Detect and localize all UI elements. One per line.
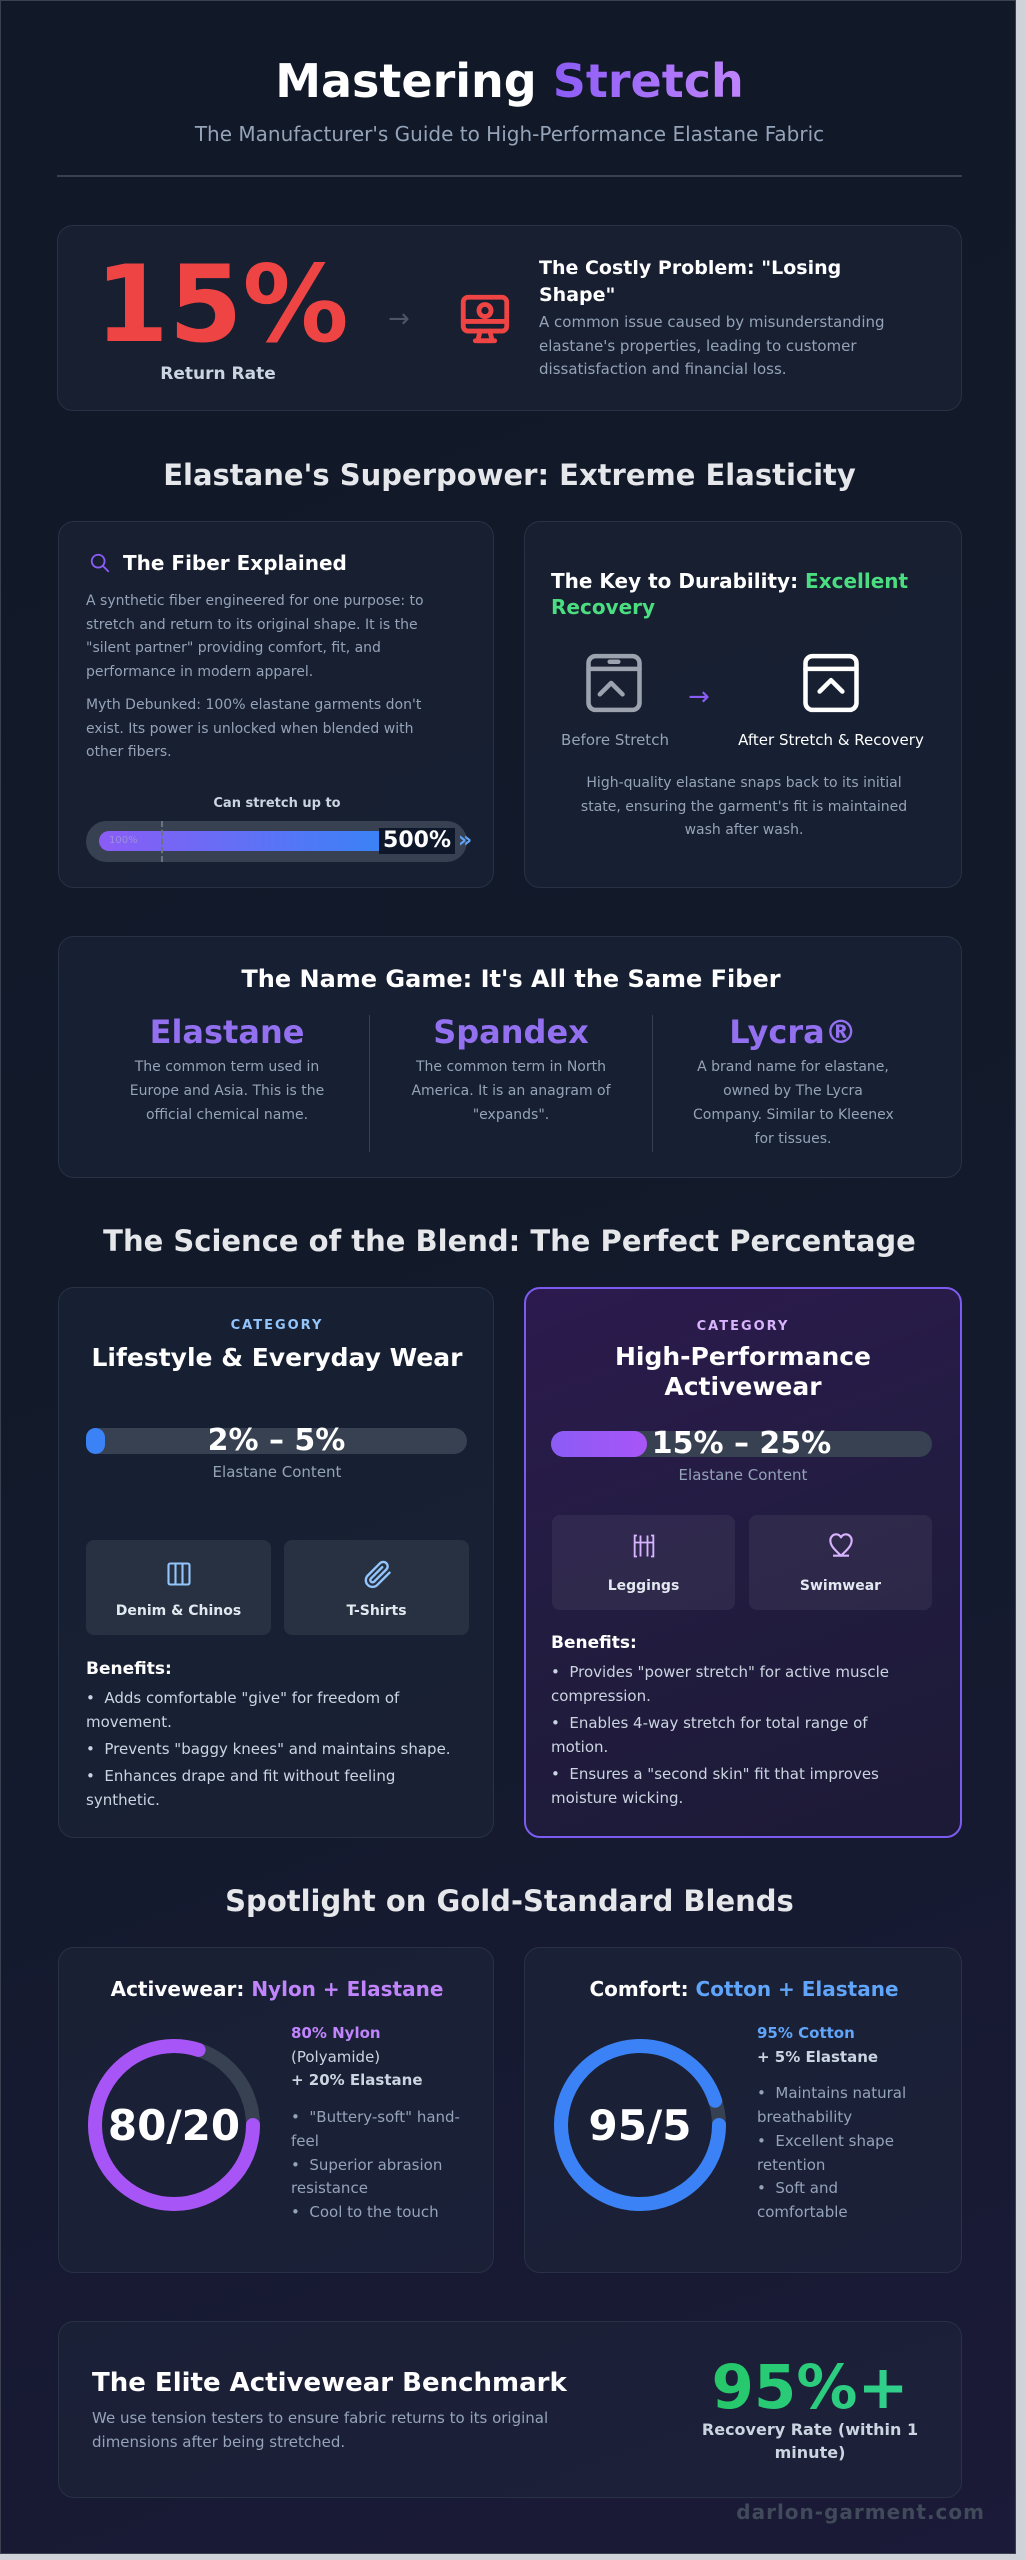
label: can stretch: Can stretch up to: [213, 796, 341, 811]
text: fiber description: "silent partner" providing comfort, fit, and: [86, 640, 381, 656]
list: lifestyle benefits: movement.: [86, 1713, 172, 1731]
heading: superpower: Elastane's Superpower: Extreme Elasticity: [163, 458, 856, 492]
heading: name game: The Name Game: It's All the Same Fiber: [241, 965, 781, 993]
panel: benchmark: [58, 2321, 962, 2498]
chart: donut 95/5: [554, 2039, 726, 2211]
text: problem: dissatisfaction and financial loss.: [539, 360, 787, 378]
text: cotton composition: • Excellent shape: [757, 2132, 894, 2150]
chart: stretch bar: 500%: [383, 828, 451, 853]
panel: costly problem: [57, 225, 962, 411]
text: benchmark description: [92, 2409, 548, 2451]
text: fiber description: performance in modern apparel.: [86, 664, 313, 680]
chart: 15-25% bar: [551, 1431, 932, 1457]
column: spandex: "expands".: [473, 1107, 549, 1123]
list: lifestyle benefits: • Adds comfortable "give" for freedom of: [86, 1689, 399, 1707]
stat: 95%+: [660, 2352, 960, 2424]
heading: key to durability: [551, 569, 908, 619]
text: problem: [539, 257, 885, 378]
text: fiber description: A synthetic fiber engineered for one purpose: to: [86, 593, 424, 609]
label: after stretch: After Stretch & Recovery: [738, 731, 924, 749]
text: nylon composition: • Cool to the touch: [291, 2203, 439, 2221]
subtitle: The Manufacturer's Guide to High-Performance Elastane Fabric: [195, 122, 824, 146]
icon: monitor: [460, 294, 510, 344]
text: nylon composition: + 20% Elastane: [291, 2071, 422, 2089]
list: lifestyle benefits: [86, 1659, 451, 1809]
chart: donut 80/20: [88, 2039, 260, 2211]
list: performance benefits: • Enables 4-way stretch for total range of: [551, 1714, 868, 1732]
column: lycra: for tissues.: [755, 1131, 831, 1147]
column: elastane: The common term used in: [135, 1059, 319, 1075]
panel: cotton blend: [524, 1947, 962, 2273]
text: fiber description: [86, 593, 424, 680]
tile: leggings: [552, 1515, 735, 1610]
label: recovery rate: minute): [775, 2443, 845, 2462]
tile: t-shirts: [284, 1540, 469, 1635]
heading: key to durability: Recovery: [551, 595, 655, 619]
chart: stretch bar: »: [458, 828, 472, 853]
column: lycra: [693, 1013, 894, 1147]
text: benchmark description: We use tension testers to ensure fabric returns to its original: [92, 2409, 548, 2427]
label: elastane content: Elastane Content: [679, 1466, 807, 1484]
icon: magnifier: [90, 554, 110, 572]
text: recovery description: [581, 775, 907, 838]
panel: recovery: [524, 521, 962, 888]
list: lifestyle benefits: • Prevents "baggy knees" and maintains shape.: [86, 1740, 451, 1758]
list: performance benefits: Benefits:: [551, 1633, 637, 1653]
panel: nylon blend: [58, 1947, 494, 2273]
label: return rate: Return Rate: [160, 364, 276, 384]
list: lifestyle benefits: synthetic.: [86, 1791, 160, 1809]
chart: donut 80/20: 80/20: [108, 2101, 240, 2150]
tile: leggings: Leggings: [608, 1578, 679, 1594]
chart: stretch bar: [86, 821, 467, 862]
icon: before stretch: [586, 654, 642, 712]
heading: performance: Activewear: [664, 1372, 822, 1401]
chart: 2-5% bar: [86, 1428, 467, 1454]
chart: 2-5% bar: 2% – 5%: [208, 1423, 345, 1458]
label: before stretch: Before Stretch: [561, 731, 669, 749]
tile: swimwear: Swimwear: [800, 1578, 881, 1594]
panel: name game: [58, 936, 962, 1178]
column: spandex: Spandex: [433, 1013, 589, 1051]
watermark: darlon-garment.com: [736, 2500, 985, 2524]
text: cotton composition: retention: [757, 2156, 825, 2174]
text: fiber description: stretch and return to its original shape. It is the: [86, 617, 418, 633]
text: nylon composition: feel: [291, 2132, 319, 2150]
chart: 15-25% bar: 15% – 25%: [652, 1426, 831, 1461]
chart: donut 95/5: 95/5: [588, 2101, 692, 2150]
text: recovery description: state, ensuring the garment's fit is maintained: [581, 799, 907, 815]
column: elastane: Europe and Asia. This is the: [130, 1083, 324, 1099]
panel: fiber explained: [58, 521, 494, 888]
heading: fiber explained: The Fiber Explained: [123, 551, 347, 575]
heading: lifestyle: Lifestyle & Everyday Wear: [92, 1343, 462, 1372]
text: benchmark description: dimensions after being stretched.: [92, 2433, 345, 2451]
list: performance benefits: moisture wicking.: [551, 1789, 683, 1807]
heading: science of the blend: The Science of the Blend: The Perfect Percentage: [103, 1224, 916, 1258]
arrow: →: [388, 304, 410, 334]
list: performance benefits: [551, 1633, 889, 1807]
label: elastane content: Elastane Content: [213, 1463, 341, 1481]
arrow: purple: →: [688, 682, 710, 712]
column: elastane: Elastane: [150, 1013, 304, 1051]
heading: comfort blend: Comfort: Cotton + Elastane: [589, 1977, 899, 2001]
text: nylon composition: resistance: [291, 2179, 368, 2197]
heading: elite benchmark: The Elite Activewear Benchmark: [92, 2368, 567, 2398]
tile: denim: [86, 1540, 271, 1635]
column: spandex: The common term in North: [416, 1059, 606, 1075]
column: elastane: [130, 1013, 324, 1123]
text: problem: elastane's properties, leading to customer: [539, 337, 857, 355]
heading: performance: [615, 1342, 871, 1401]
text: problem: Shape": [539, 284, 615, 306]
column: elastane: official chemical name.: [146, 1107, 308, 1123]
heading: activewear blend: Activewear: Nylon + Elastane: [111, 1977, 443, 2001]
stat: 95%+: 95%+: [711, 2352, 909, 2423]
text: recovery description: wash after wash.: [685, 822, 803, 838]
text: cotton composition: • Soft and: [757, 2179, 838, 2197]
text: nylon composition: 80% Nylon: [291, 2024, 381, 2042]
text: myth: Myth Debunked: 100% elastane garments don't: [86, 697, 421, 713]
text: cotton composition: breathability: [757, 2108, 852, 2126]
text: myth: [86, 697, 422, 760]
label: category: CATEGORY: [231, 1318, 323, 1333]
icon: after recovery: [803, 654, 859, 712]
text: nylon composition: [291, 2024, 460, 2221]
heading: performance: High-Performance: [615, 1342, 871, 1371]
title: Mastering Stretch: [275, 54, 744, 108]
text: problem: A common issue caused by misunderstanding: [539, 313, 885, 331]
text: nylon composition: • Superior abrasion: [291, 2156, 442, 2174]
tile: denim: Denim & Chinos: [116, 1603, 241, 1619]
list: lifestyle benefits: Benefits:: [86, 1659, 172, 1679]
column: spandex: [411, 1013, 611, 1123]
text: recovery description: High-quality elastane snaps back to its initial: [586, 775, 902, 791]
tile: t-shirts: T-Shirts: [346, 1603, 407, 1619]
panel: performance: [524, 1287, 962, 1838]
list: performance benefits: • Ensures a "second skin" fit that improves: [551, 1765, 879, 1783]
panel: lifestyle: [58, 1287, 494, 1838]
list: performance benefits: motion.: [551, 1738, 608, 1756]
label: recovery rate: Recovery Rate (within 1: [702, 2420, 918, 2439]
text: cotton composition: comfortable: [757, 2203, 848, 2221]
list: performance benefits: • Provides "power stretch" for active muscle: [551, 1663, 889, 1681]
chart: stretch bar: 100%: [109, 835, 138, 846]
text: nylon composition: • "Buttery-soft" hand-: [291, 2108, 460, 2126]
column: lycra: A brand name for elastane,: [697, 1059, 889, 1075]
list: performance benefits: compression.: [551, 1687, 651, 1705]
column: lycra: owned by The Lycra: [723, 1083, 863, 1099]
column: lycra: Company. Similar to Kleenex: [693, 1107, 894, 1123]
text: cotton composition: 95% Cotton: [757, 2024, 855, 2042]
text: cotton composition: • Maintains natural: [757, 2084, 906, 2102]
tile: swimwear: [749, 1515, 932, 1610]
column: lycra: Lycra®: [729, 1013, 857, 1051]
stat: 15%: 15%: [95, 243, 349, 366]
text: cotton composition: [757, 2024, 906, 2221]
label: recovery rate: [702, 2420, 918, 2462]
label: category: CATEGORY: [697, 1319, 789, 1334]
text: myth: exist. Its power is unlocked when blended with: [86, 721, 413, 737]
text: nylon composition: (Polyamide): [291, 2048, 380, 2066]
list: lifestyle benefits: • Enhances drape and fit without feeling: [86, 1767, 395, 1785]
text: cotton composition: + 5% Elastane: [757, 2048, 878, 2066]
column: spandex: America. It is an anagram of: [411, 1083, 611, 1099]
heading: spotlight: Spotlight on Gold-Standard Blends: [225, 1884, 794, 1918]
text: myth: other fibers.: [86, 744, 172, 760]
heading: key to durability: The Key to Durability: Excellent: [551, 569, 908, 593]
text: problem: The Costly Problem: "Losing: [539, 257, 841, 279]
